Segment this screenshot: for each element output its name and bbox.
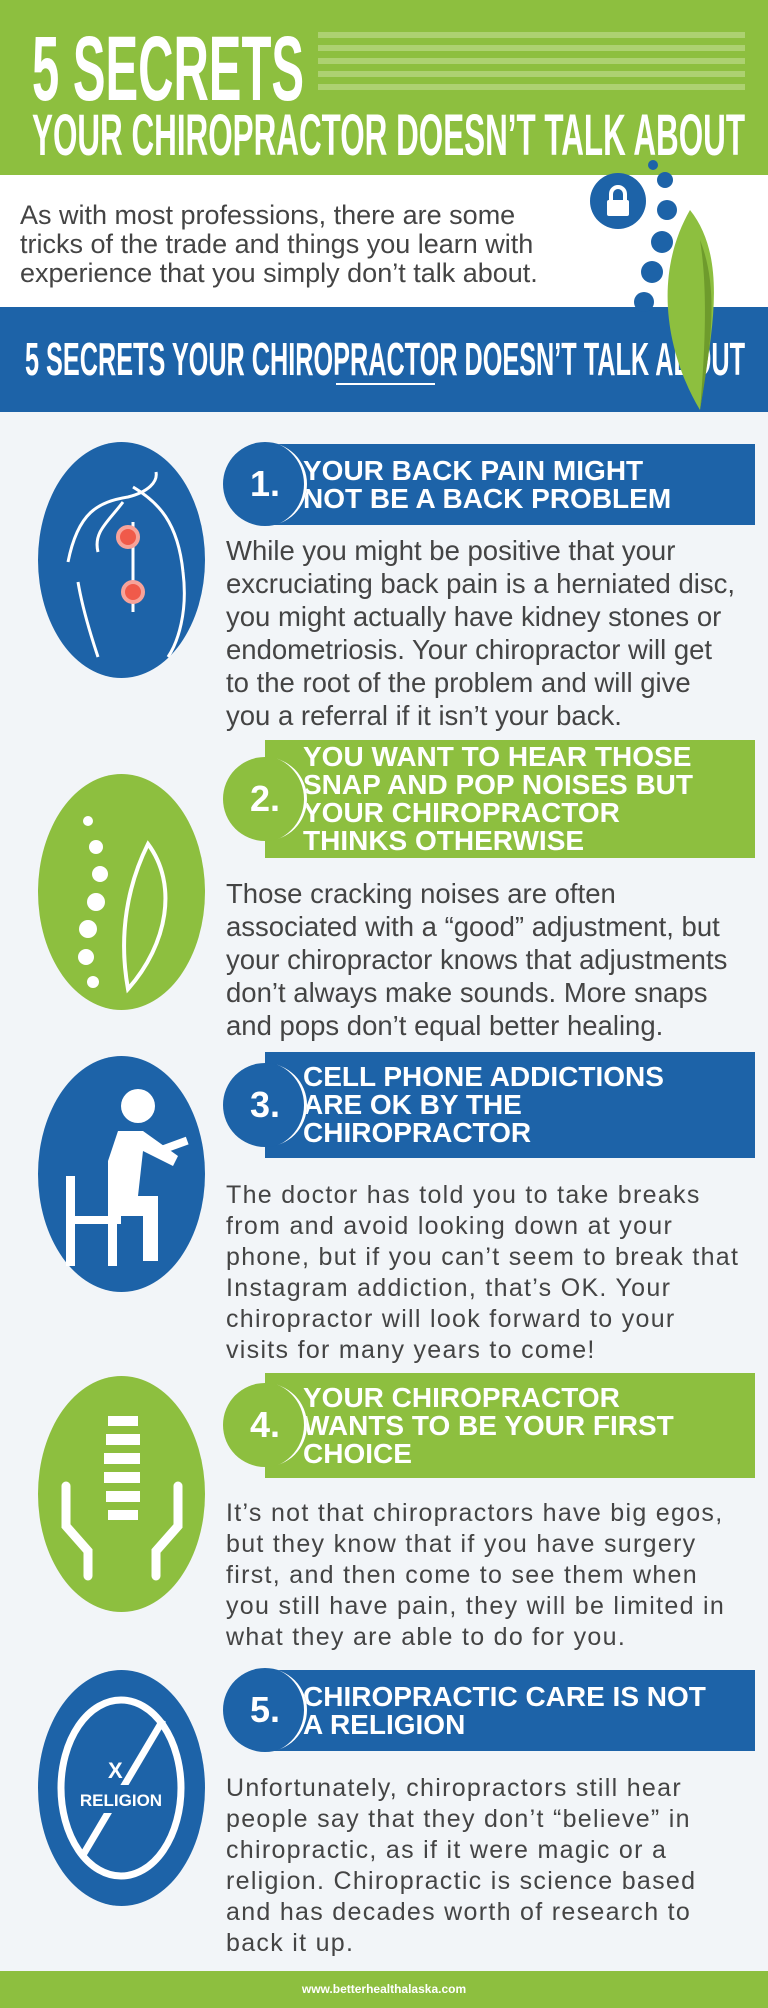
body text 2: and pops don’t equal better healing. [226, 1010, 663, 1041]
footer [0, 1971, 768, 2008]
body text 2: your chiropractor knows that adjustments [226, 944, 727, 975]
body text 2: Those cracking noises are often [226, 878, 616, 909]
heading bar 4: CHOICE [303, 1438, 412, 1468]
icon: person on phone oval [38, 1056, 205, 1292]
body text 4: but they know that if you have surgery [226, 1530, 696, 1558]
body text 5: religion. Chiropractic is science based [226, 1867, 696, 1895]
body text 2: don’t always make sounds. More snaps [226, 977, 708, 1008]
heading bar 5 [265, 1670, 755, 1751]
heading bar 1: YOUR BACK PAIN MIGHT [303, 454, 643, 486]
body text 1 [226, 535, 735, 731]
body text 4 [226, 1499, 725, 1651]
body text 3: Instagram addiction, that’s OK. Your [226, 1274, 671, 1302]
heading bar 1: NOT BE A BACK PROBLEM [303, 482, 671, 514]
heading bar 4: YOUR CHIROPRACTOR [303, 1382, 620, 1412]
footer: www.betterhealthalaska.com [302, 1982, 466, 1996]
section 3 [38, 1052, 755, 1364]
body text 4: you still have pain, they will be limited in [226, 1592, 725, 1620]
icon: back pain oval [38, 442, 205, 678]
icon: lock, dots and leaf [590, 160, 714, 410]
body text 5: Unfortunately, chiropractors still hear [226, 1774, 682, 1802]
heading bar 4 [265, 1373, 755, 1478]
section 5 [38, 1668, 755, 1957]
number 4: 4. [250, 1404, 280, 1445]
body text 3: visits for many years to come! [226, 1336, 596, 1364]
heading bar 3: CHIROPRACTOR [303, 1117, 531, 1148]
header: green title band [0, 0, 768, 175]
intro text: tricks of the trade and things you learn with [20, 229, 533, 259]
number 3: 3. [250, 1084, 280, 1125]
heading bar 2 [265, 740, 755, 858]
body text 5: and has decades worth of research to [226, 1898, 691, 1926]
blue band heading [0, 307, 768, 412]
number 2 [223, 757, 307, 841]
heading bar 2: SNAP AND POP NOISES BUT [303, 769, 693, 800]
body text 5: chiropractic, as if it were magic or a [226, 1836, 667, 1864]
icon: hands holding spine oval [38, 1376, 205, 1612]
body text 3: phone, but if you can’t seem to break that [226, 1243, 739, 1271]
intro text [20, 200, 538, 288]
body text 3: chiropractor will look forward to your [226, 1305, 676, 1333]
heading bar 1 [265, 444, 755, 525]
body text 1: excruciating back pain is a herniated disc, [226, 568, 735, 599]
body text 5 [226, 1774, 696, 1957]
heading bar 4: WANTS TO BE YOUR FIRST [303, 1410, 674, 1440]
body text 5: people say that they don’t “believe” in [226, 1805, 691, 1833]
section 4 [38, 1373, 755, 1651]
body text 5: back it up. [226, 1929, 354, 1957]
intro text: experience that you simply don’t talk about. [20, 258, 538, 288]
number 5: 5. [250, 1689, 280, 1730]
section 2 [38, 740, 755, 1041]
number 2: 2. [250, 778, 280, 819]
body text 4: first, and then come to see them when [226, 1561, 698, 1589]
number 1 [223, 442, 307, 526]
heading bar 2: YOUR CHIROPRACTOR [303, 797, 620, 828]
heading bar 3 [265, 1052, 755, 1158]
title: 5 SECRETS [32, 18, 304, 120]
number 3 [223, 1063, 307, 1147]
icon: no religion oval: X [108, 1758, 123, 1783]
body text 3 [226, 1181, 739, 1364]
heading bar 2: YOU WANT TO HEAR THOSE [303, 741, 691, 772]
heading bar 2: THINKS OTHERWISE [303, 825, 584, 856]
heading bar 3: ARE OK BY THE [303, 1089, 522, 1120]
icon: no religion oval: RELIGION [80, 1791, 162, 1810]
number 5 [223, 1668, 307, 1752]
number 4 [223, 1383, 307, 1467]
body text 1: you might actually have kidney stones or [226, 601, 721, 632]
intro text: As with most professions, there are some [20, 200, 515, 230]
icon: no religion oval [38, 1670, 205, 1906]
body text 2 [226, 878, 727, 1041]
pointer [55, 174, 90, 192]
body text 1: endometriosis. Your chiropractor will get [226, 634, 712, 665]
body text 2: associated with a “good” adjustment, but [226, 911, 720, 942]
heading bar 3: CELL PHONE ADDICTIONS [303, 1061, 664, 1092]
body text 1: you a referral if it isn’t your back. [226, 700, 622, 731]
body text 3: The doctor has told you to take breaks [226, 1181, 701, 1209]
intro panel [0, 175, 768, 307]
icon: spine leaf oval [38, 774, 205, 1010]
body text 4: It’s not that chiropractors have big egos, [226, 1499, 723, 1527]
number 1: 1. [250, 463, 280, 504]
body text 1: to the root of the problem and will give [226, 667, 691, 698]
body text 1: While you might be positive that your [226, 535, 675, 566]
body text 3: from and avoid looking down at your [226, 1212, 673, 1240]
heading bar 5: CHIROPRACTIC CARE IS NOT [303, 1680, 706, 1712]
heading bar 5: A RELIGION [303, 1708, 465, 1740]
body text 4: what they are able to do for you. [226, 1623, 626, 1651]
decorative dot grid [318, 32, 745, 90]
section 1 [38, 442, 755, 731]
